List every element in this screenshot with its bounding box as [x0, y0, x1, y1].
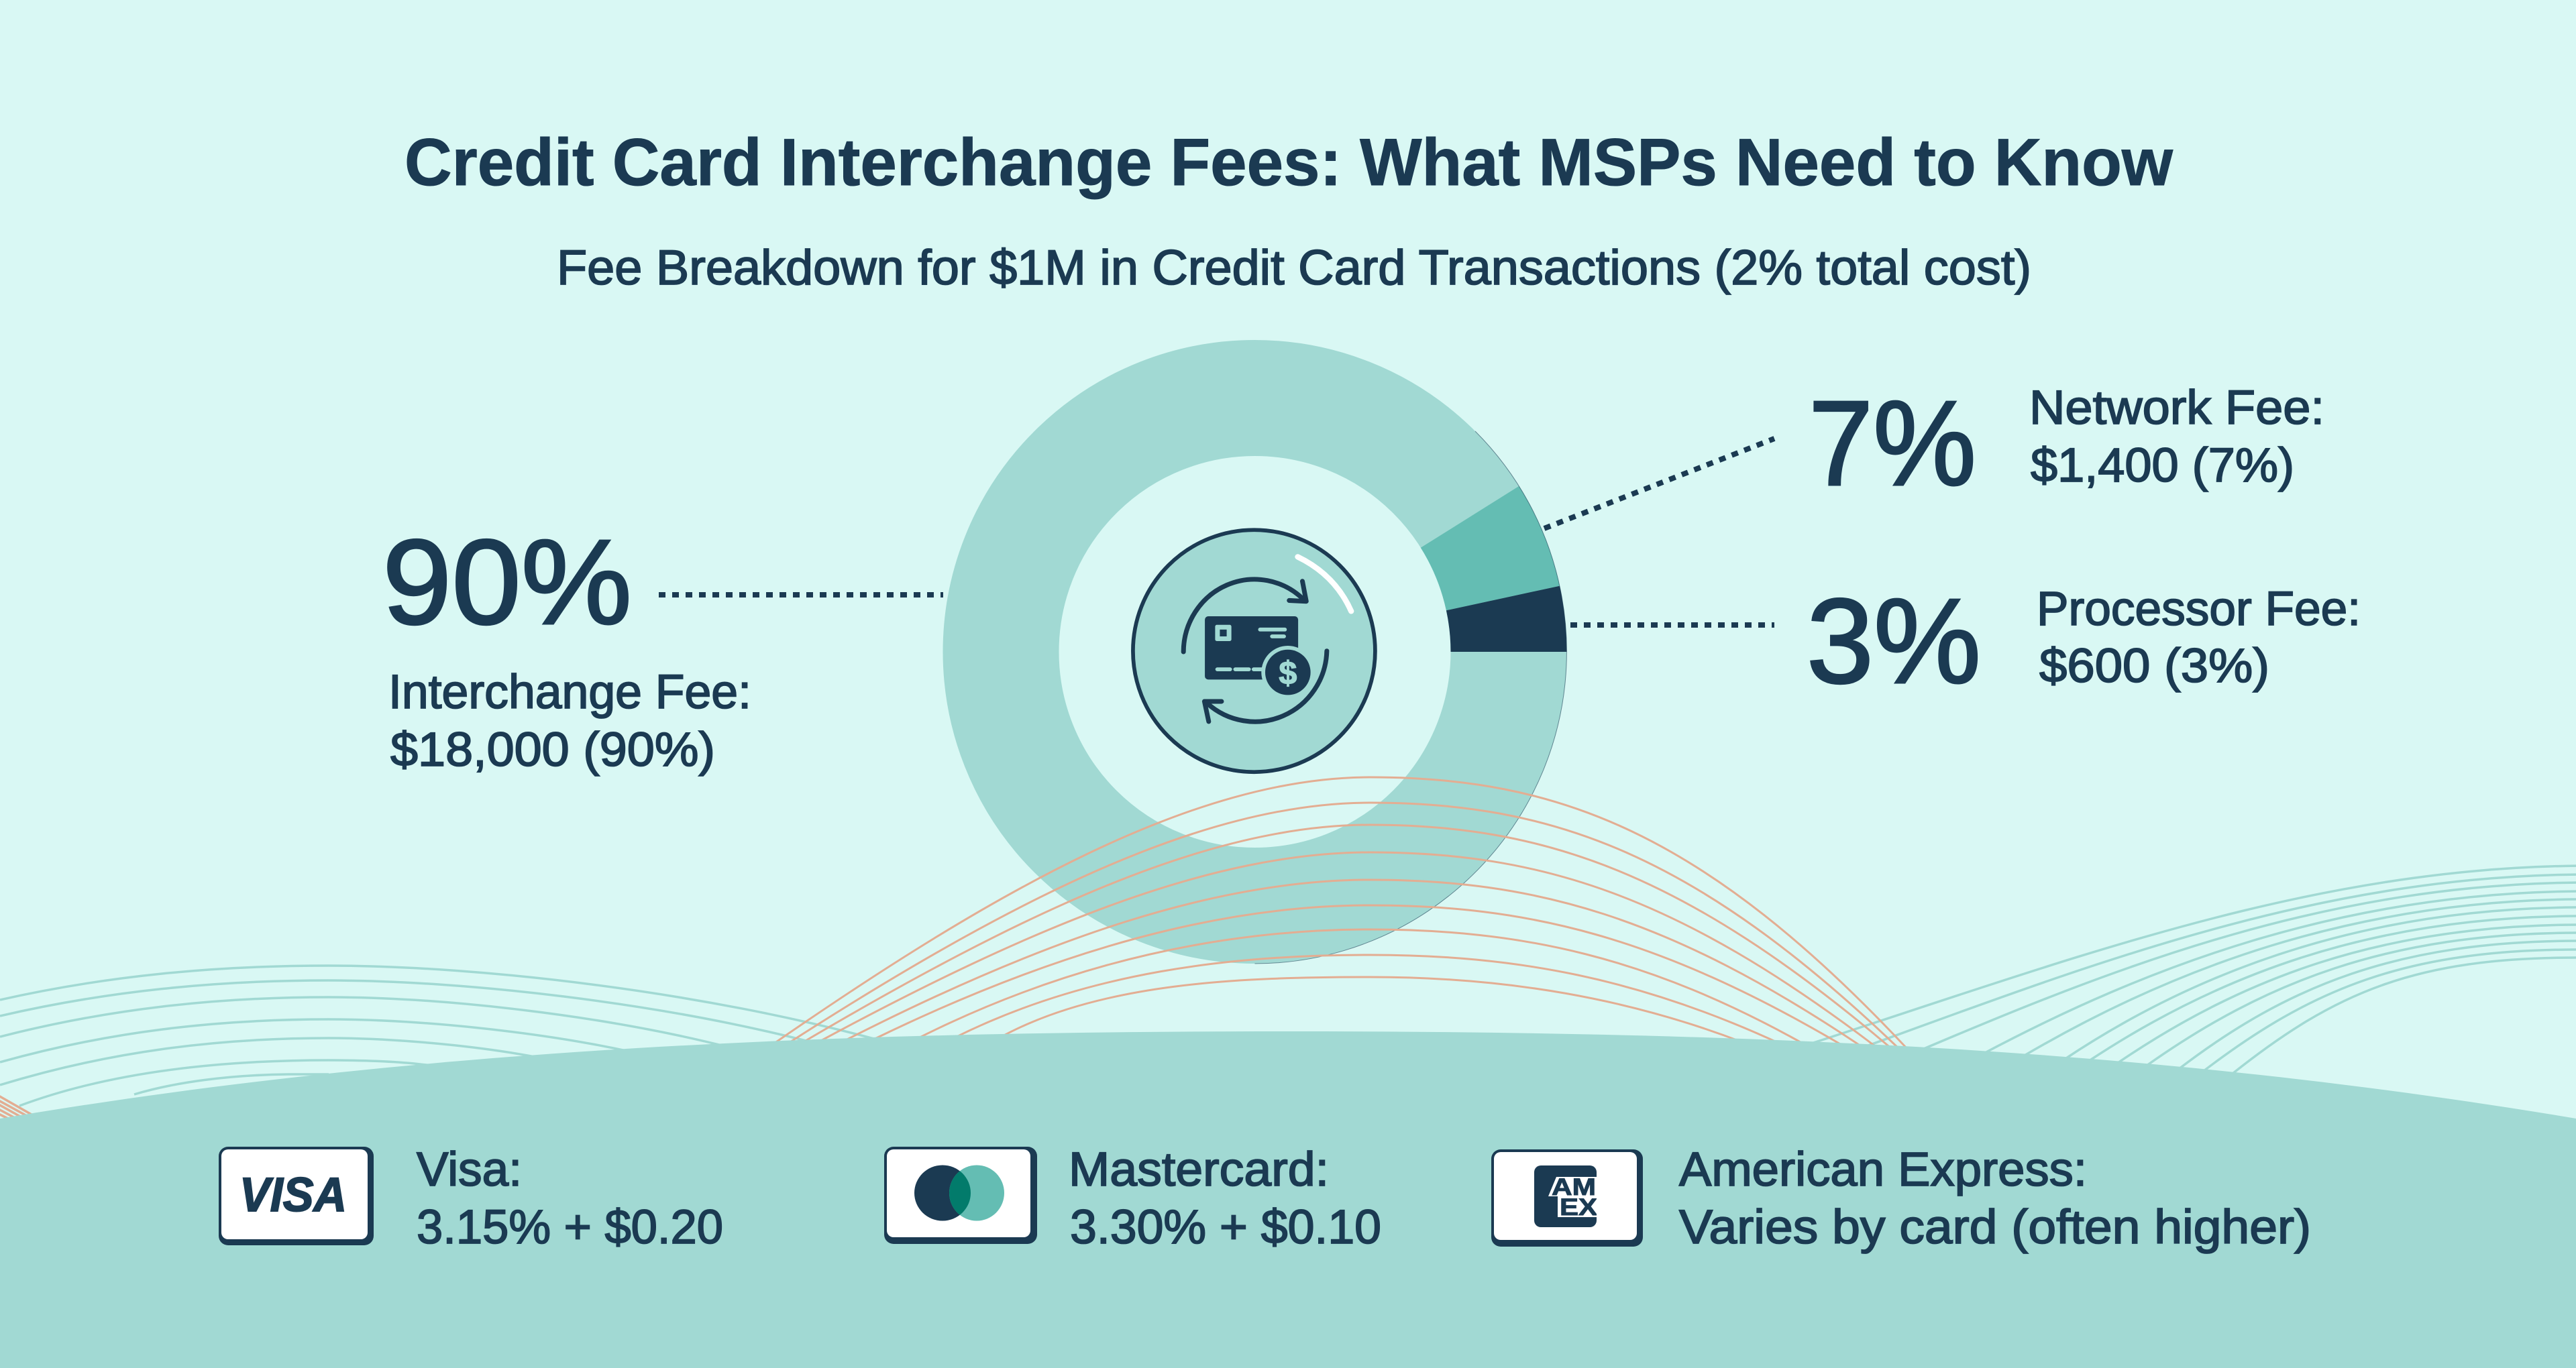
callout: processor fee	[1807, 574, 2361, 709]
white highlight arc	[1297, 557, 1351, 611]
amex rate: Varies by card (often higher)	[1679, 1201, 2311, 1254]
card: Visa	[219, 1143, 723, 1254]
card	[1205, 616, 1298, 679]
segment: processor fee 3%	[1446, 586, 1567, 652]
mastercard name: Mastercard:	[1069, 1143, 1329, 1196]
value: $18,000 (90%)	[390, 724, 715, 777]
amex logo card	[1491, 1149, 1643, 1247]
label: Interchange Fee:	[388, 666, 751, 719]
title: Credit Card Interchange Fees: What MSPs Need to Know	[405, 125, 2174, 199]
dotted leader: interchange	[659, 592, 943, 597]
stat 90%: 90%	[382, 515, 632, 650]
label: Processor Fee:	[2037, 583, 2361, 636]
label: Network Fee:	[2029, 382, 2324, 435]
dollar coin	[1261, 646, 1314, 699]
card: American Express	[1491, 1143, 2311, 1254]
teal wave lines right	[1805, 866, 2576, 1074]
amex logo card: AM	[1552, 1174, 1596, 1200]
cycle arrows	[1183, 579, 1327, 722]
icon: credit card with dollar coin and cycle arrows	[1133, 530, 1375, 772]
segment: network fee 7%	[1421, 486, 1560, 610]
segment: interchange fee 90%	[1001, 398, 1509, 905]
amex logo card: EX	[1560, 1194, 1598, 1220]
visa rate: 3.15% + $0.20	[417, 1201, 723, 1254]
dotted leader: network	[1544, 439, 1774, 528]
visa logo card: VISA	[239, 1169, 347, 1222]
mastercard logo card	[884, 1147, 1037, 1244]
card: Mastercard	[884, 1143, 1381, 1254]
donut chart	[1001, 398, 1567, 964]
visa logo card	[219, 1147, 374, 1245]
value: $1,400 (7%)	[2031, 439, 2294, 492]
dollar coin: $	[1279, 655, 1297, 691]
donut outer rim	[1254, 431, 1566, 964]
visa name: Visa:	[417, 1143, 522, 1196]
callout: network fee	[1809, 376, 2324, 511]
mastercard rate: 3.30% + $0.10	[1070, 1201, 1381, 1254]
amex name: American Express:	[1679, 1143, 2087, 1196]
icon circle	[1133, 530, 1375, 772]
stat 3%: 3%	[1807, 574, 1981, 709]
dotted leader: processor	[1570, 622, 1774, 628]
teal wave lines left	[0, 966, 879, 1106]
hill footer panel	[0, 1031, 2576, 1368]
orange wave lines	[0, 777, 1908, 1120]
stat 7%: 7%	[1809, 376, 1976, 511]
subtitle: Fee Breakdown for $1M in Credit Card Transactions (2% total cost)	[557, 241, 2031, 295]
value: $600 (3%)	[2039, 640, 2269, 693]
callout: interchange fee	[382, 515, 751, 777]
